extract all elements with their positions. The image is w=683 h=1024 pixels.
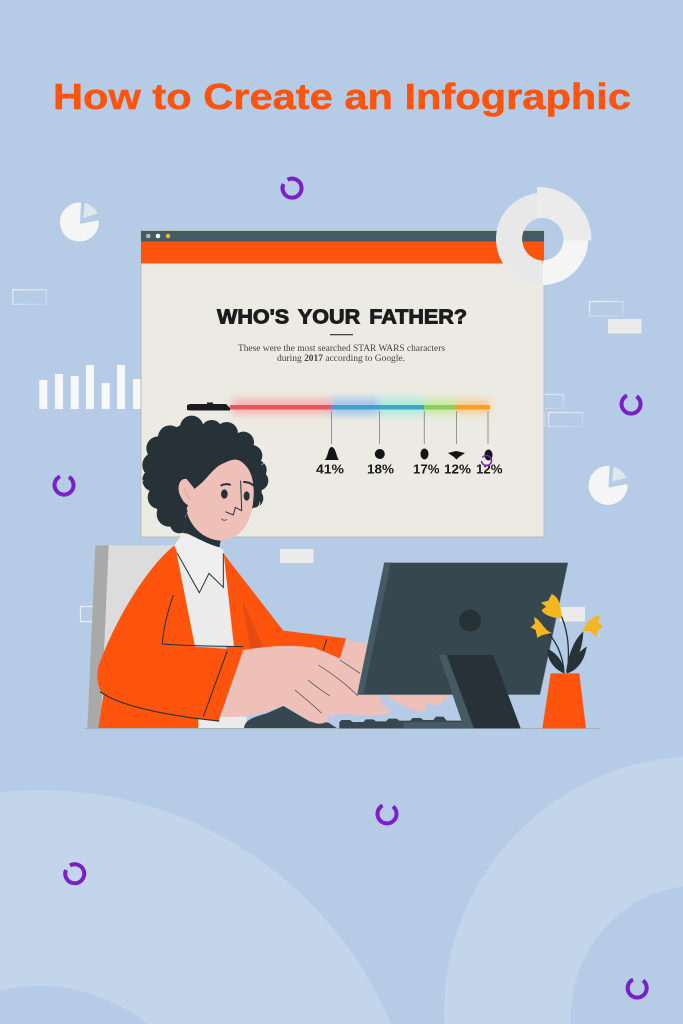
character icons (324, 447, 492, 460)
shirt undergarment (198, 717, 247, 728)
neck and face (179, 460, 254, 547)
hand (222, 646, 382, 724)
window subtitle (238, 343, 445, 363)
curly hair (142, 416, 268, 533)
browser window (141, 230, 544, 537)
percent labels: 41% (316, 462, 344, 476)
title: How to Create an Infographic (53, 76, 631, 117)
plant (531, 594, 603, 728)
person at desk (87, 416, 382, 728)
pie icon left (60, 203, 99, 242)
percent labels (316, 462, 502, 476)
bar chart decoration (39, 365, 142, 409)
percent labels: 12% (444, 462, 471, 476)
background circles (0, 757, 683, 1024)
pie icon right (589, 466, 628, 505)
office chair (87, 545, 180, 728)
desk line (85, 728, 600, 729)
orange jacket (97, 545, 346, 728)
window subtitle: These were the most searched STAR WARS characters (238, 343, 445, 353)
mouse (244, 706, 337, 728)
window subtitle: during 2017 according to Google. (277, 353, 405, 363)
percent labels: 18% (367, 462, 394, 476)
monitor (357, 563, 568, 728)
lightsaber chart (187, 398, 490, 444)
purple ring icons (55, 179, 647, 998)
shirt and collar (174, 534, 234, 647)
window heading: WHO'S YOUR FATHER? (217, 306, 467, 328)
donut chart (496, 187, 592, 285)
monitor, keyboard and plant (330, 563, 603, 728)
jacket seam lines (100, 595, 327, 721)
percent labels: 12% (476, 462, 502, 476)
decorative rectangles (13, 290, 642, 622)
fingers under monitor (330, 683, 450, 717)
percent labels: 17% (413, 462, 440, 476)
back arm skin (340, 641, 370, 697)
keyboard (339, 717, 473, 728)
